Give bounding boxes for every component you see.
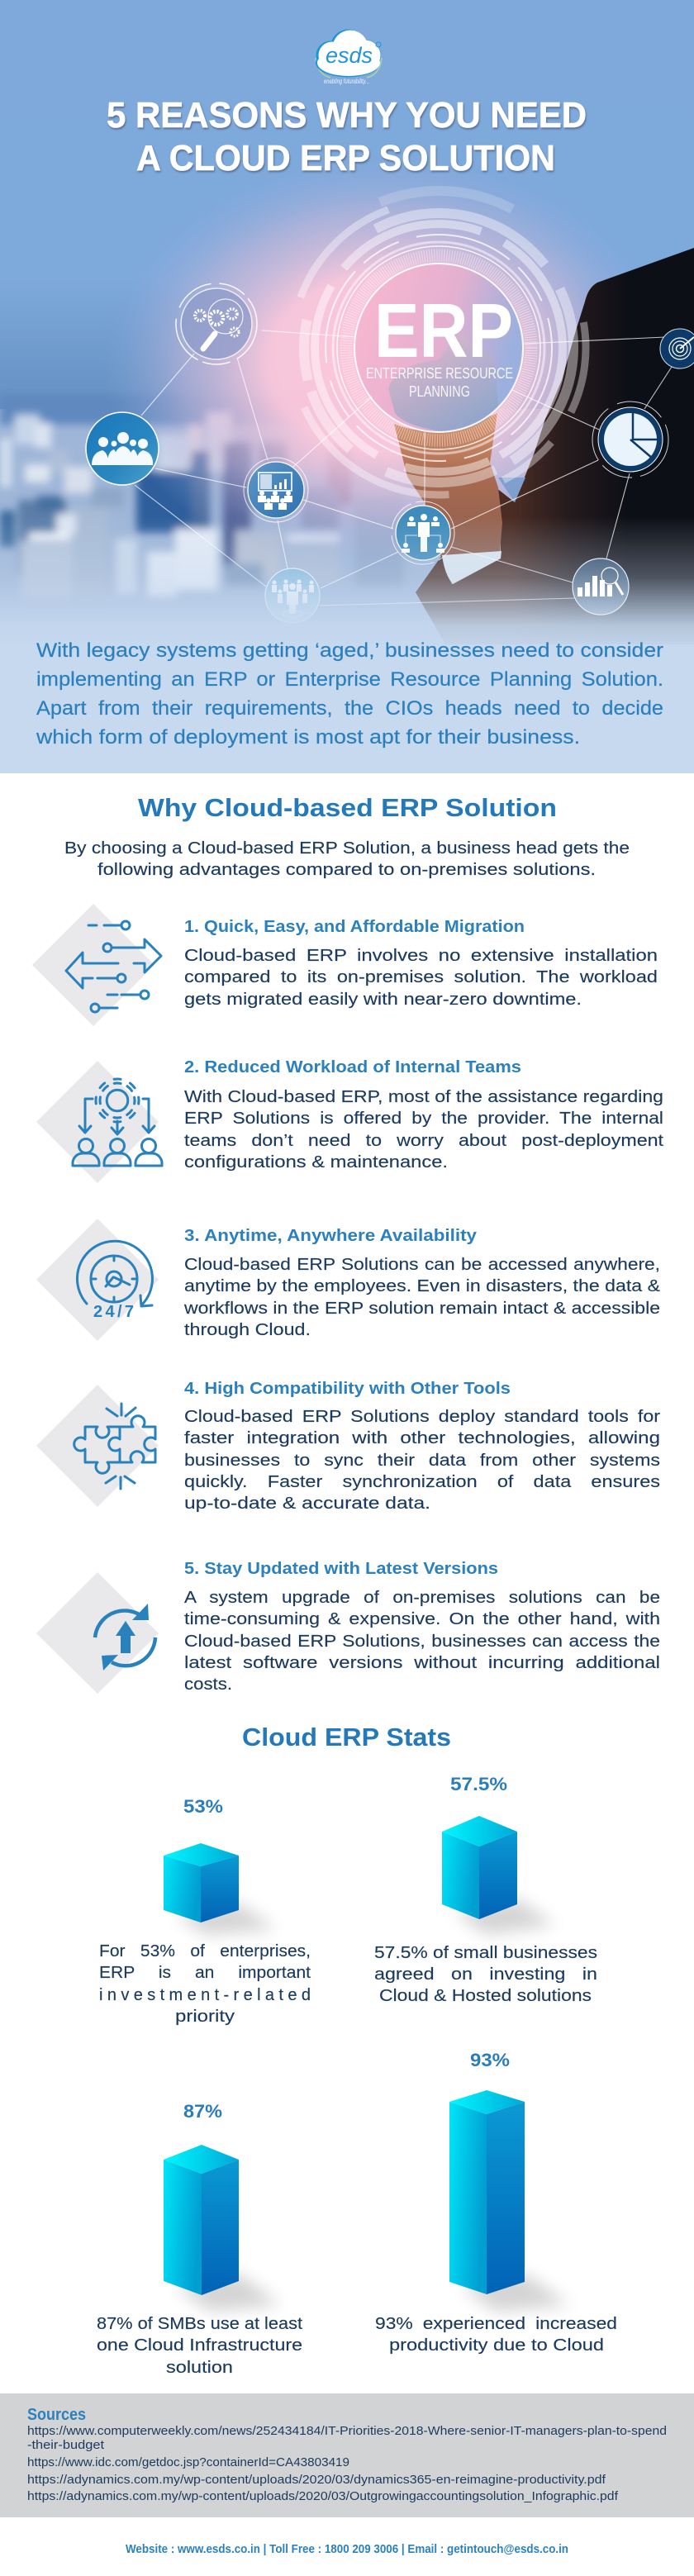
- reason 5: latest software versions without incurring additional: [184, 1654, 660, 1672]
- stat: 93%: productivity due to Cloud: [389, 2336, 604, 2355]
- footer contact line: Website : www.esds.co.in | Toll Free : 1800 209 3006 | Email : getintouch@esds.co.in: [126, 2543, 568, 2556]
- reason 4: quickly. Faster synchronization of data ensures: [184, 1473, 660, 1491]
- logo: enabling futurability...: [324, 77, 369, 85]
- intro band: Apart from their requirements, the CIOs heads need to decide: [36, 697, 663, 720]
- reason 3: workflows in the ERP solution remain intact & accessible: [183, 1300, 660, 1318]
- intro paragraph: By choosing a Cloud-based ERP Solution, a business head gets the: [64, 839, 630, 858]
- reason 3: [36, 1219, 661, 1341]
- reason 4: up-to-date & accurate data.: [184, 1495, 430, 1513]
- icon: migration arrows: [32, 904, 161, 1026]
- stat: 53%: priority: [175, 2008, 235, 2026]
- reason 1: [32, 904, 658, 1026]
- ERP disc: [354, 264, 523, 432]
- hand behind the disc: [388, 335, 498, 432]
- reason 1: compared to its on-premises solution. The workload: [184, 968, 658, 986]
- logo: esds: [326, 43, 373, 68]
- stat: 53%: For 53% of enterprises,: [99, 1942, 311, 1961]
- stat: 53%: ERP is an important: [99, 1964, 311, 1982]
- icon: presentation: [244, 458, 308, 522]
- hand and wrist: [394, 413, 502, 584]
- ERP label: [366, 288, 513, 400]
- ERP label: PLANNING: [409, 383, 470, 400]
- reason 4: 4. High Compatibility with Other Tools: [184, 1380, 511, 1398]
- stat: 57.5%: [374, 1774, 597, 2005]
- stat: 93%: 93% experienced increased: [375, 2315, 617, 2333]
- reason 1: 1. Quick, Easy, and Affordable Migration: [184, 918, 525, 936]
- reason 4: Cloud-based ERP Solutions deploy standard tools for: [184, 1408, 660, 1426]
- icon: team of people: [86, 412, 159, 485]
- stat: 87%: 87%: [183, 2101, 222, 2122]
- sources panel: https://www.idc.com/getdoc.jsp?containerId=CA43803419: [27, 2456, 349, 2469]
- reason 5: A system upgrade of on-premises solutions can be: [184, 1589, 660, 1607]
- icon: target: [660, 329, 694, 368]
- sources panel: https://adynamics.com.my/wp-content/uploads/2020/03/dynamics365-en-reimagine-productivity.pdf: [27, 2474, 606, 2487]
- businessman suit: [416, 248, 694, 653]
- icon: gear and team: [36, 1061, 162, 1183]
- blurred city skyline: [0, 395, 403, 599]
- hero background: [0, 0, 694, 653]
- icon: 24/7 clock: [36, 1219, 159, 1341]
- intro paragraph: following advantages compared to on-premises solutions.: [97, 861, 596, 879]
- reason 4: [36, 1380, 660, 1513]
- logo: [316, 30, 382, 85]
- reason 2: 2. Reduced Workload of Internal Teams: [184, 1058, 521, 1077]
- title: A CLOUD ERP SOLUTION: [136, 138, 555, 178]
- icon: bar chart with magnifier: [573, 558, 629, 615]
- icon: update arrows: [36, 1572, 159, 1694]
- intro band: implementing an ERP or Enterprise Resource Planning Solution.: [36, 668, 663, 691]
- intro paragraph: [64, 839, 630, 879]
- stat: 53%: [99, 1796, 311, 2026]
- reason 2: [36, 1058, 664, 1183]
- reason 3: through Cloud.: [184, 1321, 311, 1339]
- heading: why cloud-based ERP: Why Cloud-based ERP Solution: [138, 793, 557, 822]
- ERP label: ERP: [374, 288, 513, 373]
- reason 4: faster integration with other technologies, allowing: [184, 1429, 660, 1447]
- icon: 24/7 clock: 24/7: [93, 1303, 134, 1321]
- intro band: [0, 639, 694, 773]
- reason 2: With Cloud-based ERP, most of the assistance regarding: [184, 1088, 663, 1106]
- intro band: With legacy systems getting ‘aged,’ businesses need to consider: [36, 639, 663, 662]
- reason 3: 3. Anytime, Anywhere Availability: [184, 1227, 478, 1245]
- stat: 87%: 87% of SMBs use at least: [97, 2315, 302, 2333]
- heading: stats: Cloud ERP Stats: [242, 1723, 451, 1751]
- stat: 57.5%: 57.5% of small businesses: [374, 1944, 597, 1962]
- stat: 93%: [375, 2050, 617, 2355]
- title: 5 REASONS WHY YOU NEED: [107, 95, 587, 135]
- hero bottom fade: [0, 516, 694, 653]
- sources panel: -their-budget: [27, 2439, 104, 2452]
- reason 1: gets migrated easily with near-zero downtime.: [184, 991, 582, 1009]
- reason 5: time-consuming & expensive. On the other hand, with: [184, 1610, 660, 1628]
- icon: pie chart: [592, 402, 668, 478]
- reason 5: Cloud-based ERP Solutions, businesses can access the: [184, 1633, 660, 1651]
- reason 4: businesses to sync their data from other systems: [184, 1452, 660, 1470]
- stat: 87%: solution: [166, 2359, 233, 2377]
- reason 5: 5. Stay Updated with Latest Versions: [184, 1560, 498, 1578]
- reason 5: [36, 1560, 660, 1694]
- reason 2: ERP Solutions is offered by the provider. The internal: [184, 1110, 663, 1128]
- stat: 93%: 93%: [470, 2050, 510, 2070]
- icon: faded team: [265, 568, 320, 623]
- concentric rings: [235, 144, 643, 552]
- reason 5: costs.: [184, 1675, 232, 1694]
- stat: 53%: 53%: [183, 1796, 223, 1817]
- stat: 57.5%: agreed on investing in: [374, 1965, 597, 1984]
- pink glow: [0, 83, 694, 611]
- intro band: which form of deployment is most apt for their business.: [36, 726, 580, 749]
- stat: 57.5%: Cloud & Hosted solutions: [379, 1987, 592, 2005]
- reason 1: Cloud-based ERP involves no extensive installation: [184, 947, 658, 965]
- sources panel: https://adynamics.com.my/wp-content/uploads/2020/03/Outgrowingaccountingsolution_Infographic.pdf: [27, 2490, 619, 2503]
- reason 3: anytime by the employees. Even in disasters, the data &: [184, 1277, 661, 1295]
- ERP label: ENTERPRISE RESOURCE: [366, 365, 513, 382]
- icon: org chart: [392, 501, 454, 564]
- reason 2: configurations & maintenance.: [184, 1153, 448, 1172]
- icon: puzzle pieces: [36, 1385, 159, 1507]
- stat: 53%: investment-related: [99, 1986, 311, 2004]
- sources panel: Sources: [27, 2406, 86, 2424]
- icon: magnifier and gears: [176, 283, 257, 364]
- reason 3: Cloud-based ERP Solutions can be accessed anywhere,: [184, 1256, 660, 1274]
- sources panel: https://www.computerweekly.com/news/252434184/IT-Priorities-2018-Where-senior-IT-managers-plan-to-spend: [27, 2425, 667, 2438]
- stat: 87%: one Cloud Infrastructure: [97, 2336, 302, 2355]
- reason 2: teams don’t need to worry about post-deployment: [184, 1132, 664, 1150]
- stat: 57.5%: 57.5%: [450, 1774, 507, 1794]
- stat: 87%: [97, 2101, 302, 2377]
- sources panel: [0, 2393, 694, 2517]
- title: [107, 95, 587, 178]
- network connector lines: [135, 330, 672, 606]
